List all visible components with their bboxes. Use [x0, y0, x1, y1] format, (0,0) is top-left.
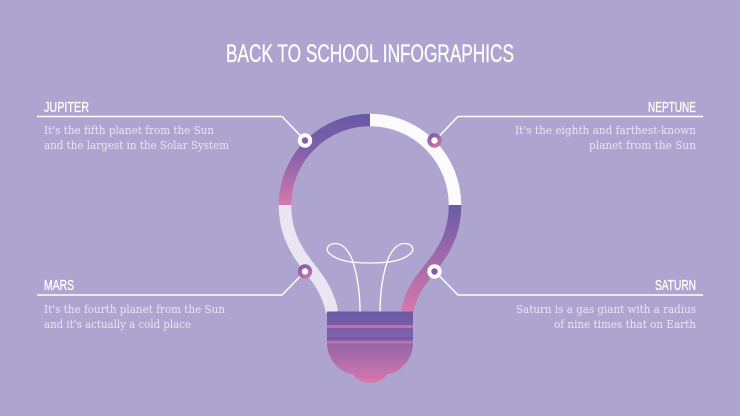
panel: Neptune	[515, 100, 696, 152]
text: Saturn description	[516, 303, 696, 331]
bulb segment: top left	[285, 120, 370, 205]
bulb segment: lower left	[285, 205, 332, 312]
bulb base	[327, 312, 413, 383]
heading: Mars: MARS	[44, 278, 74, 294]
node: Saturn	[427, 264, 442, 279]
heading: Saturn: SATURN	[655, 278, 696, 294]
connector: Saturn	[435, 272, 703, 295]
title: BACK TO SCHOOL INFOGRAPHICS	[226, 40, 514, 68]
node: Jupiter	[298, 133, 312, 148]
panel: Saturn	[516, 278, 696, 331]
node: Neptune	[427, 133, 442, 148]
text: Jupiter description	[44, 124, 230, 152]
panel: Mars	[44, 278, 225, 331]
connector: Jupiter	[37, 116, 305, 140]
heading: Jupiter: JUPITER	[44, 100, 89, 116]
icon: light bulb	[285, 120, 455, 383]
base stripes	[327, 325, 413, 378]
text: Saturn description: of nine times that on Earth	[554, 318, 696, 331]
text: Neptune description: It's the eighth and farthest-known	[515, 124, 696, 137]
text: Neptune description	[515, 124, 696, 152]
bulb segment: top right	[370, 120, 455, 205]
panel: Jupiter	[44, 100, 230, 152]
text: Mars description: and it's actually a cold place	[44, 318, 191, 331]
node: Mars	[298, 264, 312, 279]
text: Mars description: It's the fourth planet from the Sun	[44, 303, 225, 316]
bulb segment: lower right	[407, 205, 455, 312]
text: Saturn description: Saturn is a gas giant with a radius	[516, 303, 696, 316]
text: Jupiter description: and the largest in the Solar System	[44, 139, 230, 152]
text: Mars description	[44, 303, 225, 331]
connector: Mars	[37, 272, 305, 295]
heading: Neptune: NEPTUNE	[648, 100, 696, 116]
text: Neptune description: planet from the Sun	[589, 139, 696, 152]
connector: Neptune	[435, 116, 703, 140]
text: Jupiter description: It's the fifth planet from the Sun	[44, 124, 214, 137]
filament	[327, 243, 413, 312]
